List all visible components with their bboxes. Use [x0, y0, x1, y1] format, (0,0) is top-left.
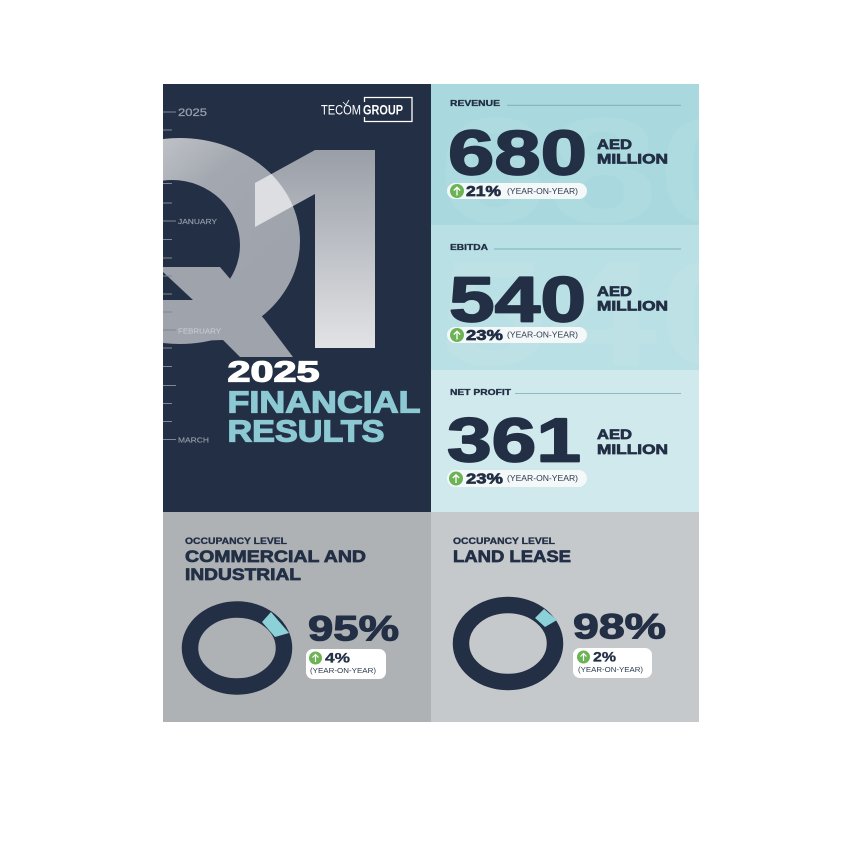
timeline	[163, 107, 221, 444]
value: 95%: 95%	[308, 610, 399, 648]
unit: AED million: MILLION	[597, 298, 668, 314]
unit: AED million: MILLION	[597, 150, 668, 166]
value: 680: 680	[448, 118, 587, 188]
timeline: MARCH	[178, 436, 209, 444]
unit: AED million	[597, 426, 668, 457]
badge: 21% year-on-year: (YEAR-ON-YEAR)	[507, 187, 578, 196]
panel: revenue: 680	[438, 86, 768, 254]
heading: occupancy land lease: OCCUPANCY LEVEL	[453, 536, 556, 546]
graphic: Q1	[163, 138, 375, 357]
label: EBITDA: EBITDA	[450, 242, 488, 252]
heading: 2025 Financial Results: FINANCIAL	[228, 384, 420, 420]
heading: 2025 Financial Results: RESULTS	[228, 414, 384, 448]
panel: occupancy commercial and industrial	[163, 512, 431, 722]
heading: occupancy commercial: INDUSTRIAL	[185, 566, 301, 584]
timeline: JANUARY	[178, 217, 217, 226]
badge: 2% year-on-year	[573, 648, 652, 678]
unit: AED million	[597, 283, 668, 314]
logo: TECOM Group	[321, 98, 412, 122]
unit: AED million: AED	[597, 136, 632, 152]
label: net profit: NET PROFIT	[450, 387, 512, 397]
badge: 2% year-on-year: 2%	[593, 648, 617, 664]
logo: TECOM Group: GROUP	[363, 102, 403, 118]
heading: occupancy land lease	[453, 536, 571, 566]
unit: AED million: MILLION	[597, 441, 668, 457]
badge: 21% year-on-year: 21%	[466, 183, 501, 200]
badge: 23% year-on-year: 23%	[466, 327, 503, 344]
value: 98%: 98%	[573, 608, 666, 646]
badge: 23% year-on-year: (YEAR-ON-YEAR)	[507, 474, 578, 483]
badge: 4% year-on-year: (YEAR-ON-YEAR)	[310, 666, 377, 675]
badge: 4% year-on-year	[306, 649, 386, 679]
value: 540: 540	[449, 264, 586, 336]
badge: 23% year-on-year	[447, 327, 587, 344]
panel: occupancy land lease	[431, 512, 699, 722]
donut chart: 98%	[461, 605, 557, 682]
value: 361: 361	[447, 406, 581, 476]
timeline: FEBRUARY	[178, 326, 221, 336]
heading: 2025 Financial Results: 2025	[228, 356, 320, 388]
timeline: 2025	[178, 107, 207, 119]
heading: 2025 Financial Results	[228, 360, 420, 442]
heading: occupancy commercial: COMMERCIAL AND	[185, 548, 366, 566]
badge: 4% year-on-year: 4%	[325, 650, 351, 666]
unit: AED million: AED	[597, 283, 632, 299]
unit: AED million	[597, 136, 668, 166]
heading: occupancy commercial: OCCUPANCY LEVEL	[185, 536, 288, 546]
panel: EBITDA: 540	[438, 229, 768, 397]
heading: occupancy commercial	[185, 536, 366, 584]
panel: Q1 title	[163, 84, 431, 512]
badge: 21% year-on-year	[447, 183, 587, 200]
badge: 2% year-on-year: (YEAR-ON-YEAR)	[578, 665, 644, 674]
badge: 23% year-on-year: (YEAR-ON-YEAR)	[507, 330, 578, 340]
donut chart: 95%	[190, 610, 289, 686]
badge: 23% year-on-year: 23%	[466, 470, 503, 488]
badge: 23% year-on-year	[447, 470, 587, 488]
unit: AED million: AED	[597, 426, 632, 442]
heading: occupancy land lease: LAND LEASE	[453, 548, 571, 566]
label: revenue: REVENUE	[450, 98, 500, 108]
panel: net profit	[431, 370, 699, 512]
logo: TECOM Group: TECOM	[321, 102, 361, 118]
